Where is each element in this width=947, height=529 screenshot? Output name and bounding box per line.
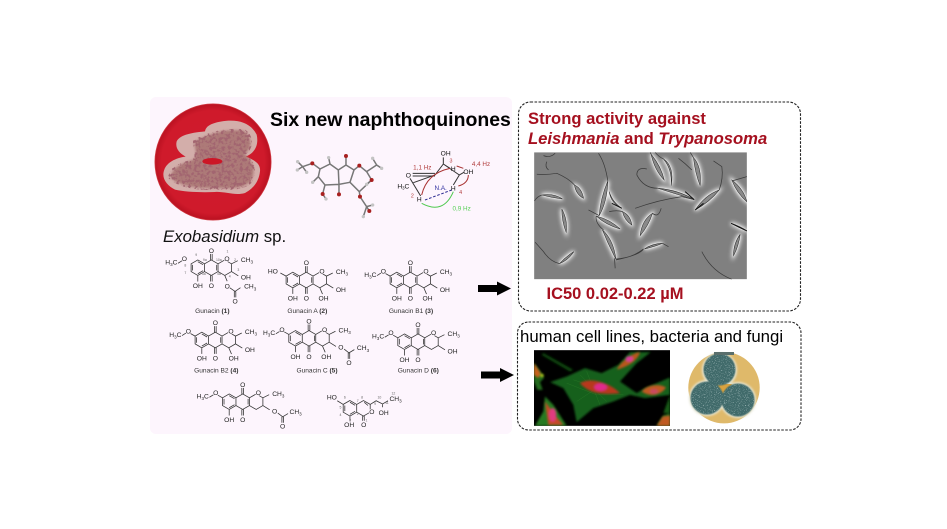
NMR coupling diagram: 3	[402, 186, 405, 191]
structure: Gunacin 1: 3	[237, 268, 239, 272]
structure: Gunacin B2: O	[186, 329, 191, 336]
structure: Gunacin B1: OH	[440, 287, 450, 294]
NMR coupling diagram: H	[417, 197, 422, 204]
structure: Gunacin 1: O	[225, 284, 230, 291]
structure: Gunacin 1: OH	[193, 283, 203, 290]
structure: unnamed acetate derivative: 3	[299, 412, 302, 417]
structure: Gunacin 1: 3	[170, 262, 173, 267]
structure: Gunacin C: O	[306, 319, 312, 326]
structure: Gunacin D: O	[415, 322, 421, 329]
structure: Gunacin A: HO	[268, 269, 278, 276]
label: Gunacin 1: Gunacin (1)	[195, 308, 230, 315]
structure: isocoumarin: 1	[365, 418, 367, 422]
structure: isocoumarin: 8	[361, 396, 363, 400]
structure: isocoumarin: 7	[357, 399, 359, 403]
structure: Gunacin 1: H	[165, 259, 170, 266]
structure: isocoumarin: O	[361, 422, 366, 429]
structure: Gunacin B1: OH	[423, 296, 433, 303]
structure: unnamed acetate derivative: C	[204, 393, 209, 400]
structure: Gunacin 1: 7	[184, 271, 186, 275]
label: Gunacin B1: Gunacin B1 (3)	[389, 308, 433, 315]
structure: unnamed acetate derivative: O	[240, 417, 245, 424]
structure: Gunacin 1: O	[224, 256, 230, 263]
structure: isocoumarin: 5	[340, 405, 342, 409]
NMR coupling diagram: H	[451, 166, 456, 173]
structure: Gunacin B1: CH	[440, 269, 450, 276]
NMR coupling diagram: C	[405, 183, 410, 190]
NMR coupling diagram: N.A.	[435, 185, 447, 192]
structure: isocoumarin: HO	[327, 395, 337, 402]
structure: isocoumarin	[327, 391, 402, 429]
structure: Gunacin 1: O	[209, 283, 214, 290]
structure: unnamed acetate derivative: 3	[282, 393, 285, 398]
structure: Gunacin C: O	[306, 354, 312, 361]
structure: Gunacin B1	[364, 260, 453, 303]
structure: unnamed acetate derivative: O	[240, 382, 245, 389]
structure: unnamed acetate derivative: O	[213, 390, 218, 397]
NMR coupling diagram: O	[406, 173, 411, 180]
image: trypanosome micrograph	[534, 152, 747, 280]
structure: Gunacin D: OH	[399, 357, 410, 364]
structure: Gunacin B1: 3	[450, 272, 453, 277]
structure: Gunacin D: CH	[448, 331, 457, 338]
structure: Gunacin D: H	[372, 333, 377, 340]
structure: Gunacin B1: H	[364, 272, 369, 279]
structure: Gunacin B1: 3	[369, 274, 372, 279]
structure: unnamed acetate derivative: 3	[201, 396, 204, 401]
structure: Gunacin C: O	[346, 360, 352, 367]
structure: Gunacin D: O	[431, 330, 436, 337]
structure: unnamed acetate derivative: CH	[290, 409, 299, 416]
structure: Gunacin C: OH	[321, 354, 331, 361]
structure: Gunacin C	[263, 319, 370, 367]
3D crystal structure model	[296, 154, 383, 218]
structure: Gunacin C: H	[263, 330, 268, 337]
NMR coupling diagram	[397, 151, 490, 212]
structure: Gunacin B2: 3	[255, 332, 258, 337]
structure: Gunacin B2: CH	[245, 329, 255, 336]
image: fungal culture plate	[688, 352, 760, 423]
structure: isocoumarin: 12	[392, 391, 395, 395]
structure: Gunacin C: C	[270, 330, 275, 337]
IC50 value: IC50 0.02-0.22 µM	[546, 285, 684, 303]
structure: Gunacin D: C	[379, 333, 384, 340]
structure: isocoumarin: 10	[377, 396, 381, 400]
structure: Gunacin B2: OH	[229, 356, 239, 363]
label: Gunacin D: Gunacin D (6)	[398, 367, 439, 374]
structure: Gunacin A: O	[304, 260, 309, 267]
structure: Gunacin B2: O	[228, 329, 234, 336]
structure: Gunacin B2: O	[213, 320, 218, 327]
structure: Gunacin D: 3	[457, 333, 460, 338]
structure: Gunacin B1: O	[408, 260, 413, 267]
NMR coupling diagram: H	[397, 183, 402, 190]
structure: unnamed acetate derivative: CH	[272, 391, 282, 398]
structure: Gunacin B1: O	[408, 296, 413, 303]
structure: Gunacin D: 3	[377, 336, 380, 341]
structure: Gunacin C: CH	[339, 327, 348, 334]
structure: Gunacin 1: 9a	[203, 258, 207, 262]
NMR coupling diagram: 4,4 Hz	[472, 161, 490, 168]
structure: isocoumarin: 3	[399, 398, 402, 403]
NMR coupling diagram: OH	[441, 151, 451, 158]
heading: strong activity: Strong activity against	[528, 109, 706, 128]
structure: Gunacin A: O	[304, 296, 309, 303]
NMR coupling diagram: OH	[463, 169, 474, 176]
NMR coupling diagram: 4	[459, 190, 462, 196]
structure: Gunacin D: OH	[448, 349, 458, 356]
structure: Gunacin D: O	[388, 330, 394, 337]
structure: Gunacin C: 3	[367, 348, 370, 353]
structure: Gunacin 1: 3	[251, 259, 254, 264]
NMR coupling diagram: H	[451, 185, 456, 192]
structure: Gunacin 1	[165, 248, 257, 305]
structure: Gunacin 1: O	[232, 298, 238, 305]
structure: Gunacin 1: CH	[244, 284, 254, 291]
structure: Gunacin C: CH	[357, 345, 367, 352]
structure: Gunacin C: O	[322, 327, 327, 334]
NMR coupling diagram: 1,1 Hz	[413, 164, 431, 171]
structure: Gunacin C: OH	[290, 354, 301, 361]
structure: Gunacin 1: 9	[195, 253, 197, 257]
structure: Gunacin 1: 4	[229, 274, 231, 278]
label: Gunacin C: Gunacin C (5)	[296, 367, 338, 374]
structure: isocoumarin: CH	[389, 396, 399, 403]
structure: unnamed acetate derivative: O	[280, 424, 285, 431]
NMR coupling diagram: 0,9 Hz	[453, 205, 471, 212]
structure: Gunacin 1: O	[182, 256, 187, 263]
structure: Gunacin 1: CH	[241, 257, 251, 264]
structure: Gunacin C: 3	[348, 330, 351, 335]
arrow: to counter-screening	[481, 368, 514, 382]
structure: Gunacin 1: OH	[241, 275, 251, 282]
NMR coupling diagram: 2	[411, 193, 414, 199]
heading: target parasites: Leishmania and Trypanosoma	[528, 129, 767, 148]
structure: Gunacin B2	[169, 320, 258, 363]
structure: unnamed acetate derivative	[197, 382, 302, 431]
heading: human cell lines, bacteria and fungi: human cell lines, bacteria and fungi	[520, 327, 783, 346]
structure: Gunacin B2: OH	[245, 347, 255, 354]
structure: isocoumarin: 9	[374, 402, 376, 406]
structure: Gunacin 1: C	[173, 259, 178, 266]
label: Gunacin A: Gunacin A (2)	[287, 308, 327, 315]
panel: counter-screening	[518, 322, 801, 430]
structure: Gunacin B1: C	[372, 272, 377, 279]
structure: unnamed acetate derivative: O	[256, 390, 261, 397]
structure: Gunacin B1: O	[423, 269, 429, 276]
structure: isocoumarin: 4	[340, 413, 342, 417]
structure: Gunacin C: O	[338, 345, 343, 352]
structure: isocoumarin: 11	[385, 401, 389, 405]
structure: Gunacin B1: O	[381, 269, 386, 276]
structure: Gunacin 1: 4a	[217, 272, 221, 276]
structure: isocoumarin: O	[369, 409, 374, 416]
structure: Gunacin A: OH	[288, 296, 298, 303]
arrow: to antiparasitic activity	[478, 282, 511, 296]
structure: Gunacin A: OH	[336, 287, 346, 294]
structure: Gunacin 1: 8	[184, 264, 186, 268]
organism label: Exobasidium sp.	[163, 227, 286, 246]
panel: compounds background	[150, 97, 512, 434]
structure: Gunacin A	[268, 260, 349, 303]
NMR coupling diagram: 3	[450, 159, 453, 165]
structure: Gunacin D	[372, 322, 460, 364]
structure: Gunacin A: O	[319, 269, 325, 276]
label: Gunacin B2: Gunacin B2 (4)	[194, 367, 238, 374]
structure: Gunacin B2: OH	[197, 356, 207, 363]
structure: Gunacin A: OH	[319, 296, 329, 303]
structure: unnamed acetate derivative: OH	[224, 417, 234, 424]
structure: Gunacin 1: 10a	[216, 258, 222, 262]
structure: Gunacin 1: O	[209, 248, 214, 255]
structure: Gunacin 1: 2	[234, 258, 236, 262]
image: fluorescent human cells	[534, 350, 670, 426]
structure: Gunacin C: 3	[268, 333, 271, 338]
structure: isocoumarin: 2	[357, 412, 359, 416]
structure: Gunacin 1: 1	[227, 250, 229, 254]
structure: Gunacin A: CH	[336, 269, 346, 276]
structure: Gunacin 1: 5a	[202, 272, 206, 276]
icon: red agar petri dish	[154, 104, 272, 220]
structure: Gunacin C: O	[279, 327, 285, 334]
structure: isocoumarin: 6	[344, 396, 346, 400]
structure: Gunacin B2: 3	[174, 334, 177, 339]
structure: unnamed acetate derivative: H	[197, 393, 201, 400]
structure: Gunacin 1: 3	[254, 286, 257, 291]
structure: isocoumarin: OH	[379, 410, 389, 417]
structure: isocoumarin: OH	[344, 422, 354, 429]
structure: Gunacin B1: OH	[392, 296, 402, 303]
structure: isocoumarin: 3	[349, 418, 351, 422]
structure: Gunacin A: 3	[346, 272, 349, 277]
title: Six new naphthoquinones	[270, 109, 511, 131]
structure: unnamed acetate derivative: O	[272, 409, 277, 416]
panel: antiparasitic activity	[518, 102, 800, 311]
structure: Gunacin B2: C	[177, 332, 182, 339]
structure: Gunacin B2: H	[169, 332, 174, 339]
structure: Gunacin D: O	[415, 357, 421, 364]
structure: Gunacin B2: O	[213, 356, 218, 363]
